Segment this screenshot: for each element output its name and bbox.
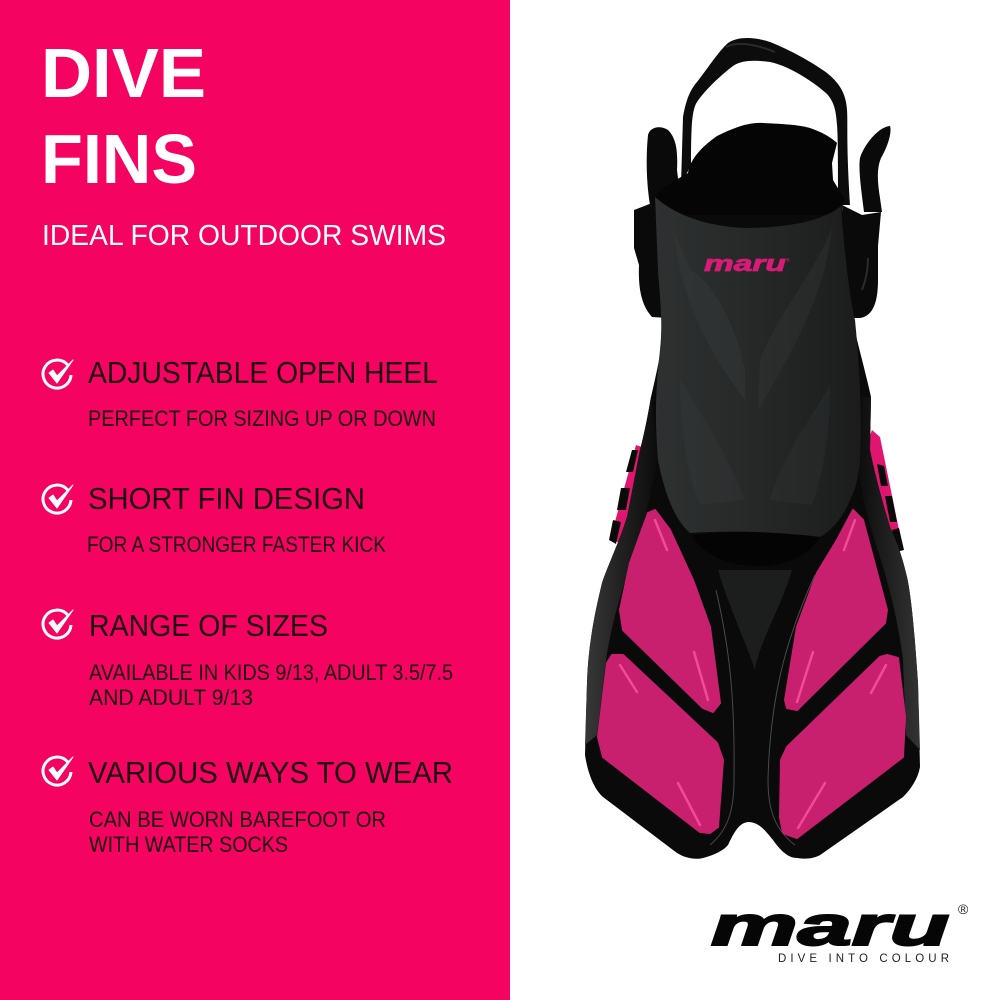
panel: pink background xyxy=(0,0,510,1000)
blade ribs xyxy=(620,520,886,828)
left side rail xyxy=(585,397,658,745)
subtitle: IDEAL FOR OUTDOOR SWIMS xyxy=(42,220,446,252)
feature: various ways to wear: WITH WATER SOCKS xyxy=(89,832,288,857)
toe vent xyxy=(692,532,820,566)
brand logo: ® xyxy=(958,901,969,917)
foot pocket xyxy=(655,197,861,537)
right side rail xyxy=(858,397,920,750)
feature: various ways to wear: CAN BE WORN BAREFOOT OR xyxy=(89,807,386,832)
spine lines xyxy=(710,575,815,845)
pocket texture xyxy=(673,228,832,505)
panel: upper left blade xyxy=(620,510,720,712)
feature: adjustable open heel xyxy=(43,355,438,431)
heel strap xyxy=(681,38,850,205)
title: FINS xyxy=(41,120,197,198)
feature: short fin design: FOR A STRONGER FASTER KICK xyxy=(87,532,386,557)
right buckle xyxy=(842,126,891,318)
side pink stripes xyxy=(609,430,904,552)
panel: lower right blade xyxy=(780,655,905,838)
feature: range of sizes xyxy=(43,608,453,710)
pocket logo: maru xyxy=(704,251,786,276)
feature: short fin design: SHORT FIN DESIGN xyxy=(88,481,365,516)
fin body silhouette xyxy=(585,200,920,859)
icon: check circle xyxy=(43,485,73,513)
dive fin product illustration xyxy=(585,38,920,859)
pocket logo: ® xyxy=(786,257,790,264)
centre textured spine xyxy=(718,570,792,670)
feature: adjustable open heel: PERFECT FOR SIZING UP OR DOWN xyxy=(88,406,436,431)
icon: check circle xyxy=(43,757,73,785)
icon: check circle xyxy=(43,360,73,388)
left buckle xyxy=(634,127,680,318)
title: DIVE xyxy=(41,34,206,112)
feature: range of sizes: AVAILABLE IN KIDS 9/13, ADULT 3.5/7.5 xyxy=(89,660,453,685)
feature: range of sizes: AND ADULT 9/13 xyxy=(89,685,253,710)
brand logo: maru xyxy=(711,894,949,957)
brand logo: DIVE INTO COLOUR xyxy=(778,953,949,965)
feature: various ways to wear xyxy=(43,755,453,857)
panel: lower left blade xyxy=(598,655,723,833)
inner foot opening xyxy=(655,123,845,215)
panel: upper right blade xyxy=(785,510,887,710)
feature: range of sizes: RANGE OF SIZES xyxy=(89,608,328,643)
feature: various ways to wear: VARIOUS WAYS TO WEAR xyxy=(88,755,453,790)
icon: check circle xyxy=(43,610,73,638)
title xyxy=(41,34,206,198)
feature: short fin design xyxy=(43,481,386,557)
feature: adjustable open heel: ADJUSTABLE OPEN HEEL xyxy=(88,355,438,390)
